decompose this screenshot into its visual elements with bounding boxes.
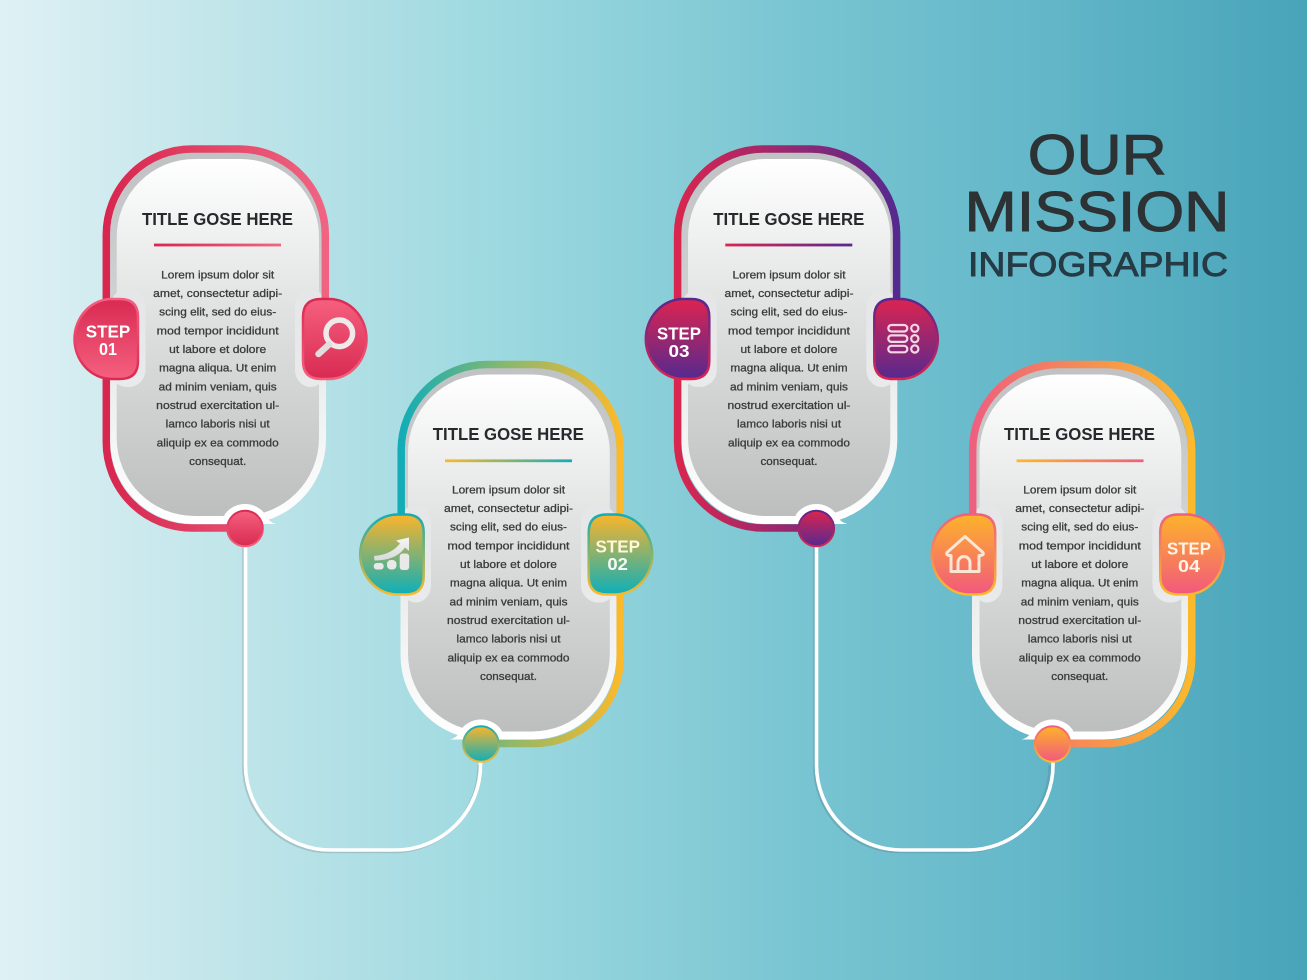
text block: step 04: magna aliqua. Ut enim	[1021, 578, 1138, 590]
text block: step 04: mod tempor incididunt	[1019, 540, 1142, 552]
text block: step 02: Lorem ipsum dolor sit	[452, 484, 566, 496]
divider: step 02	[445, 459, 572, 462]
text block: step 01: lamco laboris nisi ut	[166, 419, 271, 431]
badge: step 02	[589, 514, 652, 594]
divider: step 03	[725, 244, 852, 246]
text block: step 01: ut labore et dolore	[169, 344, 266, 356]
badge: step 01: STEP	[86, 321, 131, 341]
text block: step 04: Lorem ipsum dolor sit	[1023, 484, 1137, 496]
divider: step 04	[1016, 459, 1144, 462]
text block: step 03: mod tempor incididunt	[728, 325, 851, 337]
text block: step 03: lamco laboris nisi ut	[737, 419, 842, 431]
heading: step 03: TITLE GOSE HERE	[713, 209, 864, 229]
badge: step 01: 01	[99, 339, 117, 359]
text block: step 01: magna aliqua. Ut enim	[159, 363, 276, 375]
text block: step 04: ad minim veniam, quis	[1021, 596, 1139, 608]
badge: step 03: 03	[668, 341, 690, 361]
text block: step 04: scing elit, sed do eius-	[1021, 522, 1139, 534]
text block: step 02: magna aliqua. Ut enim	[450, 578, 567, 590]
text block: step 01: amet, consectetur adipi-	[153, 288, 282, 300]
node: step 02	[463, 726, 499, 762]
text block: step 01: scing elit, sed do eius-	[159, 307, 276, 319]
text block: step 02	[444, 484, 573, 683]
text block: step 04: ut labore et dolore	[1031, 559, 1128, 571]
text block: step 02: consequat.	[480, 671, 537, 683]
connector: step 3 to step 4	[815, 546, 1053, 852]
panel: step 02 card	[360, 364, 652, 762]
text block: step 04	[1015, 484, 1145, 683]
text block: step 04: lamco laboris nisi ut	[1028, 634, 1133, 646]
node: step 03	[798, 511, 834, 546]
connector: step 1 to step 2	[244, 546, 480, 852]
text block: step 01: aliquip ex ea commodo	[157, 437, 279, 449]
panel: step 04 card	[932, 364, 1224, 762]
text block: step 01	[153, 269, 282, 468]
badge: step 01	[74, 299, 138, 379]
text block: step 02: scing elit, sed do eius-	[450, 522, 567, 534]
text block: step 04: amet, consectetur adipi-	[1015, 503, 1145, 515]
heading: step 04: TITLE GOSE HERE	[1004, 424, 1155, 444]
text block: step 03: ad minim veniam, quis	[730, 381, 848, 393]
text block: step 02: amet, consectetur adipi-	[444, 503, 573, 515]
badge: step 03	[646, 299, 709, 379]
title	[964, 123, 1230, 284]
text block: step 01: mod tempor incididunt	[157, 325, 280, 337]
heading: step 01: TITLE GOSE HERE	[142, 209, 293, 229]
text block: step 04: nostrud exercitation ul-	[1018, 615, 1142, 627]
badge: step 04: 04	[1178, 556, 1200, 576]
icon: house	[932, 514, 995, 594]
text block: step 03	[724, 269, 854, 468]
heading: step 02: TITLE GOSE HERE	[433, 424, 584, 444]
badge: step 03: STEP	[657, 323, 701, 343]
badge: step 04	[1160, 514, 1224, 594]
text block: step 01: consequat.	[189, 456, 246, 468]
text block: step 02: nostrud exercitation ul-	[447, 615, 570, 627]
text block: step 03: consequat.	[760, 456, 818, 468]
badge: step 04: STEP	[1167, 538, 1211, 558]
text block: step 03: amet, consectetur adipi-	[724, 288, 854, 300]
icon: growth chart	[360, 514, 424, 594]
text block: step 02: mod tempor incididunt	[448, 540, 570, 552]
text block: step 04: consequat.	[1051, 671, 1108, 683]
title: OUR	[1028, 123, 1167, 186]
text block: step 03: aliquip ex ea commodo	[728, 437, 850, 449]
text block: step 02: lamco laboris nisi ut	[456, 634, 561, 646]
icon: list	[874, 299, 938, 379]
text block: step 03: Lorem ipsum dolor sit	[732, 269, 846, 281]
text block: step 01: nostrud exercitation ul-	[156, 400, 279, 412]
text block: step 01: ad minim veniam, quis	[159, 381, 277, 393]
title: INFOGRAPHIC	[968, 246, 1228, 284]
text block: step 02: ut labore et dolore	[460, 559, 557, 571]
node: step 04	[1035, 726, 1070, 762]
text block: step 03: scing elit, sed do eius-	[730, 307, 848, 319]
panel: step 01 card	[74, 149, 366, 546]
node: step 01	[227, 511, 263, 546]
text block: step 03: magna aliqua. Ut enim	[730, 363, 847, 375]
badge: step 02: 02	[607, 554, 628, 574]
text block: step 04: aliquip ex ea commodo	[1019, 652, 1141, 664]
text block: step 02: ad minim veniam, quis	[450, 596, 568, 608]
panel: step 03 card	[646, 149, 938, 546]
icon: magnifying glass	[303, 299, 366, 379]
text block: step 03: ut labore et dolore	[740, 344, 837, 356]
text block: step 01: Lorem ipsum dolor sit	[161, 269, 275, 281]
text block: step 02: aliquip ex ea commodo	[448, 652, 570, 664]
badge: step 02: STEP	[595, 536, 640, 556]
divider: step 01	[154, 244, 281, 246]
title: MISSION	[964, 180, 1230, 243]
text block: step 03: nostrud exercitation ul-	[727, 400, 851, 412]
